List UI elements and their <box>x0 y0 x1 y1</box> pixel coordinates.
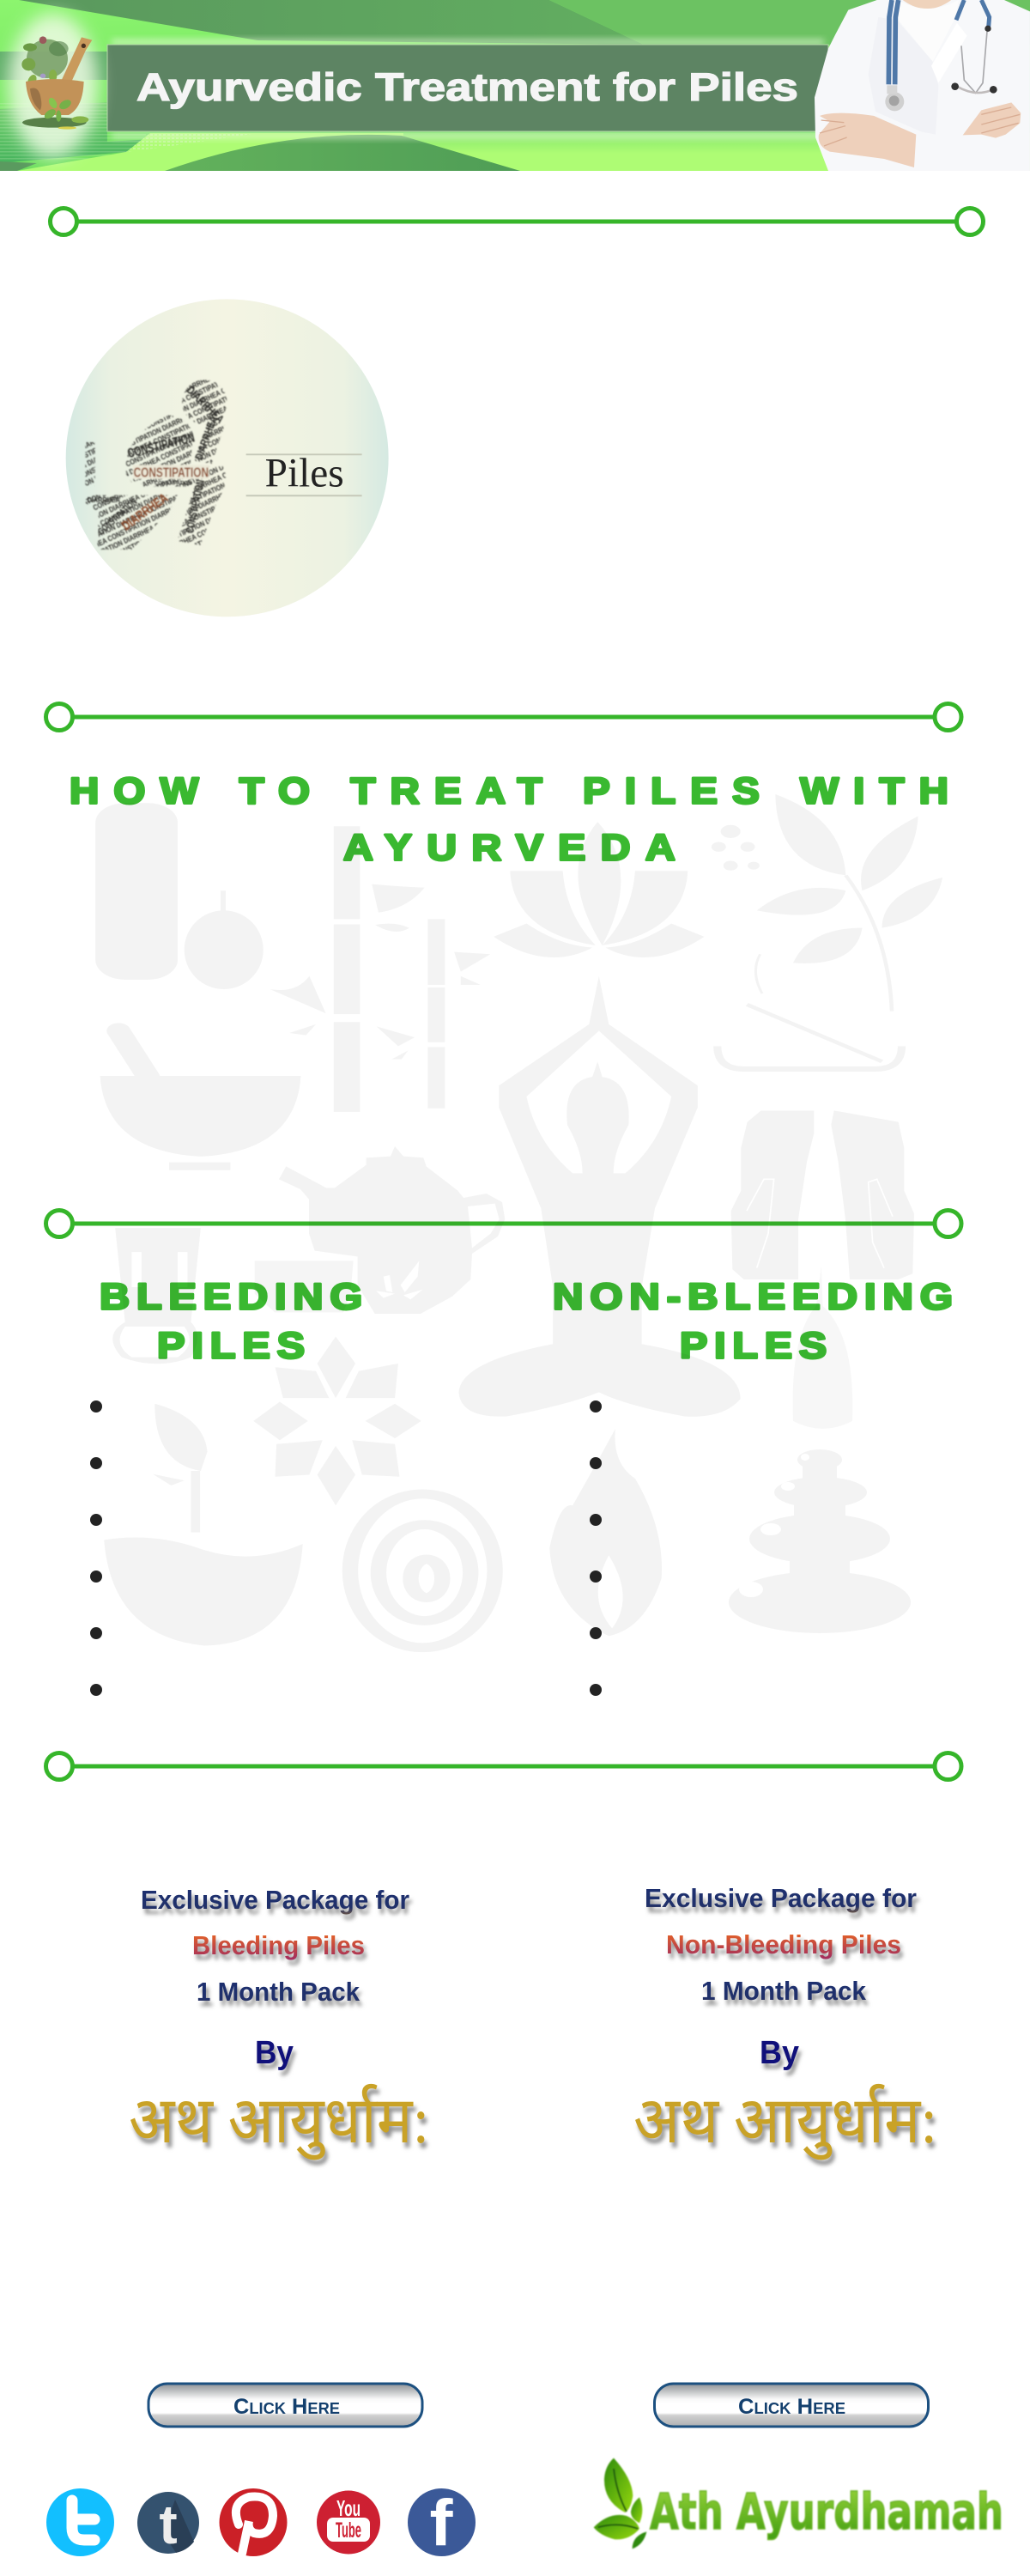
divider 3 <box>46 1211 961 1236</box>
doctor photo <box>815 0 1030 171</box>
button: click here right: Click Here <box>738 2395 845 2419</box>
title banner <box>107 45 828 131</box>
image: piles word art disc <box>65 299 389 617</box>
icon: youtube: Tube <box>336 2518 361 2543</box>
package: non-bleeding piles: Exclusive Package for <box>645 1883 917 1913</box>
word-art figure: CONSTIPATION <box>96 497 139 538</box>
word-art figure: CONSTIPATION DIARRHEA CONSTIPATION DIARRHEA CONSTIPATION DIARRHEA <box>50 392 276 503</box>
word-art figure: CONSTIPATION DIARRHEA CONSTIPATION DIARRHEA CONSTIPATION DIARRHEA <box>57 407 283 519</box>
button: click here right <box>654 2384 929 2427</box>
divider 1 <box>50 208 984 235</box>
heading: non-bleeding piles: NON-BLEEDING <box>553 1276 960 1317</box>
word-art figure: CONSTIPATION DIARRHEA CONSTIPATION DIARRHEA CONSTIPATION DIARRHEA <box>93 485 320 597</box>
word-art figure <box>84 380 228 550</box>
word-art figure: CONSTIPATION DIARRHEA CONSTIPATION DIARRHEA CONSTIPATION DIARRHEA <box>78 453 306 566</box>
word-art figure: DIARRHEA CONSTIPATION DIARRHEA CONSTIPATION DIARRHEA CONSTIPATION <box>75 446 301 558</box>
icon: youtube <box>317 2490 380 2554</box>
package: non-bleeding piles: Non-Bleeding Piles <box>666 1929 901 1959</box>
icon: youtube: You <box>336 2495 360 2521</box>
package: bleeding piles: Bleeding Piles <box>192 1930 365 1960</box>
button: click here left: Click Here <box>233 2395 340 2419</box>
word-art figure: CONSTIPATION <box>154 480 191 486</box>
piles label <box>246 452 362 496</box>
word-art figure: DIARRHEA CONSTIPATION DIARRHEA CONSTIPATION DIARRHEA CONSTIPATION <box>39 368 265 480</box>
word-art figure: CONSTIPATION <box>126 430 197 461</box>
package: non-bleeding piles: By <box>760 2035 799 2071</box>
heading: how to treat piles: AYURVEDA <box>343 828 690 869</box>
word-art figure: DIARRHEA CONSTIPATION DIARRHEA CONSTIPATION DIARRHEA CONSTIPATION <box>17 321 244 434</box>
bullet list: non-bleeding piles <box>590 1400 602 1696</box>
heading: bleeding piles: BLEEDING <box>100 1276 369 1317</box>
word-art figure: CONSTIPATION <box>134 466 209 481</box>
heading: non-bleeding piles <box>553 1276 960 1367</box>
word-art figure: DIARRHEA CONSTIPATION DIARRHEA CONSTIPATION DIARRHEA CONSTIPATION <box>82 462 309 574</box>
word-art figure: CONSTIPATION DIARRHEA CONSTIPATION DIARRHEA CONSTIPATION DIARRHEA <box>86 470 312 581</box>
heading: non-bleeding piles: PILES <box>680 1326 833 1367</box>
word-art figure: CONSTIPATION DIARRHEA CONSTIPATION DIARRHEA CONSTIPATION DIARRHEA <box>64 422 291 535</box>
word-art figure: DIARRHEA CONSTIPATION DIARRHEA CONSTIPATION DIARRHEA CONSTIPATION <box>89 477 316 589</box>
heading: how to treat piles: HOW TO TREAT PILES WITH <box>70 771 963 812</box>
package: bleeding piles: अथ आयुर्धाम: <box>129 2083 429 2160</box>
word-art figure: DIARRHEA <box>185 384 227 426</box>
icon: mortar with herbs <box>9 14 98 158</box>
watermark: ayurveda icons <box>95 794 942 1648</box>
package: bleeding piles: By <box>255 2035 294 2071</box>
package: non-bleeding piles: अथ आयुर्धाम: <box>633 2083 937 2160</box>
icon: tumblr: t <box>159 2494 178 2555</box>
word-art figure: DIARRHEA <box>119 491 171 534</box>
divider 2 <box>46 704 961 730</box>
icon: pinterest <box>220 2488 287 2556</box>
logo: ath ayurdhamah <box>594 2458 1003 2549</box>
word-art figure: DIARRHEA CONSTIPATION DIARRHEA CONSTIPATION DIARRHEA CONSTIPATION <box>60 415 287 526</box>
word-art figure: CONSTIPATION DIARRHEA CONSTIPATION DIARRHEA CONSTIPATION DIARRHEA <box>13 313 240 426</box>
title banner: Ayurvedic Treatment for Piles <box>136 65 798 109</box>
package: bleeding piles: Exclusive Package for <box>141 1885 409 1915</box>
word-art figure: CONSTIPATION DIARRHEA CONSTIPATION DIARRHEA CONSTIPATION DIARRHEA <box>35 361 262 472</box>
icon: twitter <box>46 2488 114 2556</box>
watermark: stones <box>729 1449 911 1633</box>
word-art figure: DIARRHEA CONSTIPATION DIARRHEA CONSTIPATION DIARRHEA CONSTIPATION <box>31 353 258 465</box>
word-art figure: DIARRHEA <box>193 415 220 462</box>
header banner <box>0 0 1030 171</box>
button: click here left <box>148 2384 422 2427</box>
word-art figure: DIARRHEA <box>88 495 121 504</box>
icon: facebook: f <box>429 2487 453 2560</box>
word-art figure: CONSTIPATION DIARRHEA CONSTIPATION DIARRHEA CONSTIPATION DIARRHEA <box>21 329 247 441</box>
word-art figure: DIARRHEA CONSTIPATION DIARRHEA CONSTIPATION DIARRHEA CONSTIPATION <box>9 306 236 418</box>
word-art figure: DIARRHEA CONSTIPATION DIARRHEA CONSTIPATION DIARRHEA CONSTIPATION <box>53 399 280 511</box>
heading: how to treat piles <box>70 771 963 869</box>
word-art figure: DIARRHEA CONSTIPATION DIARRHEA CONSTIPATION DIARRHEA CONSTIPATION <box>24 337 251 449</box>
word-art figure: CONSTIPATION DIARRHEA CONSTIPATION DIARRHEA CONSTIPATION DIARRHEA <box>42 376 270 488</box>
icon: green leaves <box>594 2458 646 2549</box>
icon: facebook <box>408 2487 476 2560</box>
word-art figure: DIARRHEA CONSTIPATION DIARRHEA CONSTIPATION DIARRHEA CONSTIPATION <box>45 384 272 495</box>
package: non-bleeding piles <box>633 1883 937 2160</box>
package: bleeding piles <box>129 1885 429 2160</box>
package: bleeding piles: 1 Month Pack <box>197 1977 360 2007</box>
word-art figure: CONSTIPATION DIARRHEA CONSTIPATION DIARRHEA CONSTIPATION DIARRHEA <box>71 438 298 550</box>
word-art figure: DIARRHEA CONSTIPATION DIARRHEA CONSTIPATION DIARRHEA CONSTIPATION <box>68 430 294 543</box>
word-art figure: CONSTIPATION <box>183 478 207 534</box>
piles label: Piles <box>265 452 344 496</box>
divider 4 <box>46 1753 961 1779</box>
watermark: teapot and cup <box>255 1146 505 1314</box>
word-art figure: CONSTIPATION DIARRHEA CONSTIPATION DIARRHEA CONSTIPATION DIARRHEA <box>27 345 255 457</box>
heading: bleeding piles <box>100 1276 369 1367</box>
icon: tumblr <box>137 2492 199 2555</box>
package: non-bleeding piles: 1 Month Pack <box>701 1976 867 2006</box>
bullet list: bleeding piles <box>90 1400 102 1696</box>
watermark: feet <box>731 1110 914 1279</box>
heading: bleeding piles: PILES <box>157 1326 312 1367</box>
